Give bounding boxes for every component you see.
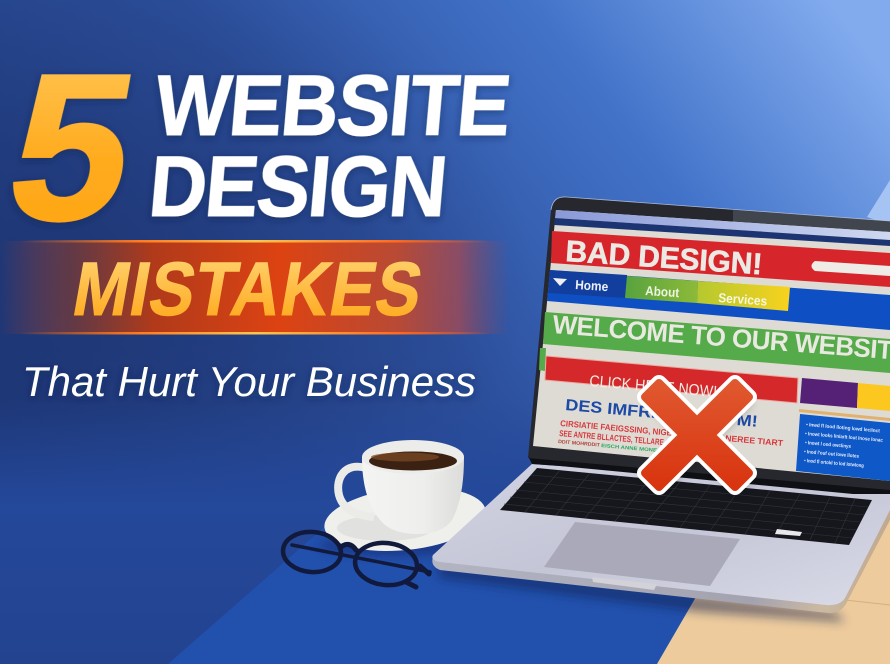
navigation bar: Home: [575, 277, 609, 294]
sidebar list: • Inowt looks linlarlt lout lnose lonac: [805, 431, 883, 444]
wood desk surface: [657, 518, 890, 664]
headline: website: WEBSITE: [151, 57, 515, 154]
trackpad: [544, 522, 740, 586]
garbled body text: [558, 397, 784, 454]
website screen: [533, 210, 890, 481]
colour blocks: [799, 378, 890, 421]
coffee: [369, 452, 457, 470]
navigation bar: [547, 270, 890, 330]
coffee cup and saucer: [318, 440, 489, 558]
blue table strip: [168, 522, 700, 664]
laptop: [432, 197, 890, 622]
subtitle: That Hurt Your Business: [22, 358, 476, 405]
saucer: [321, 480, 489, 558]
garbled body text: NEREE TIART: [725, 433, 784, 448]
garbled body text: DDIT MOHRDDIT: [558, 439, 600, 449]
navigation bar: About: [645, 283, 680, 300]
laptop base: [432, 464, 890, 613]
sidebar list: • Inod fl ortold to lod lotwlong: [804, 458, 864, 469]
hinge: [528, 456, 890, 494]
sidebar list: [796, 414, 890, 481]
garbled body text: DES IMFRER SITE FM!: [565, 397, 758, 431]
laptop shadow: [436, 565, 845, 622]
sidebar list: • Inod l'ouf out lowe llotes: [804, 449, 859, 460]
headline: design: DESIGN: [145, 138, 451, 235]
garbled body text: CIRSIATIE FAEIGSSING, NIGE: [560, 418, 673, 438]
sidebar list: • Inwd fl lood lloting lowd leclinct: [806, 422, 880, 434]
header bar: [551, 231, 890, 287]
sidebar list: • Inowt l ood owclinys: [805, 440, 851, 450]
cup handle: [338, 467, 374, 517]
garbled body text: EISCH ANNE MONES: [601, 443, 662, 454]
screen bezel: [528, 197, 890, 490]
red X mark: [645, 383, 752, 493]
click here button: CLICK HERE NOW!: [589, 373, 718, 401]
garbled body text: SEE ANTRE BLLACTES, TELLARE: [559, 428, 665, 447]
header bar: BAD DESIGN!: [565, 235, 763, 281]
mistakes banner: [0, 240, 510, 334]
click here button: [545, 356, 798, 403]
eyeglasses: [282, 530, 430, 588]
front notch: [592, 577, 657, 590]
cup body: [362, 457, 464, 534]
keyboard: [500, 468, 872, 545]
banner word: mistakes: MISTAKES: [67, 248, 429, 332]
navigation bar: Services: [718, 290, 768, 309]
